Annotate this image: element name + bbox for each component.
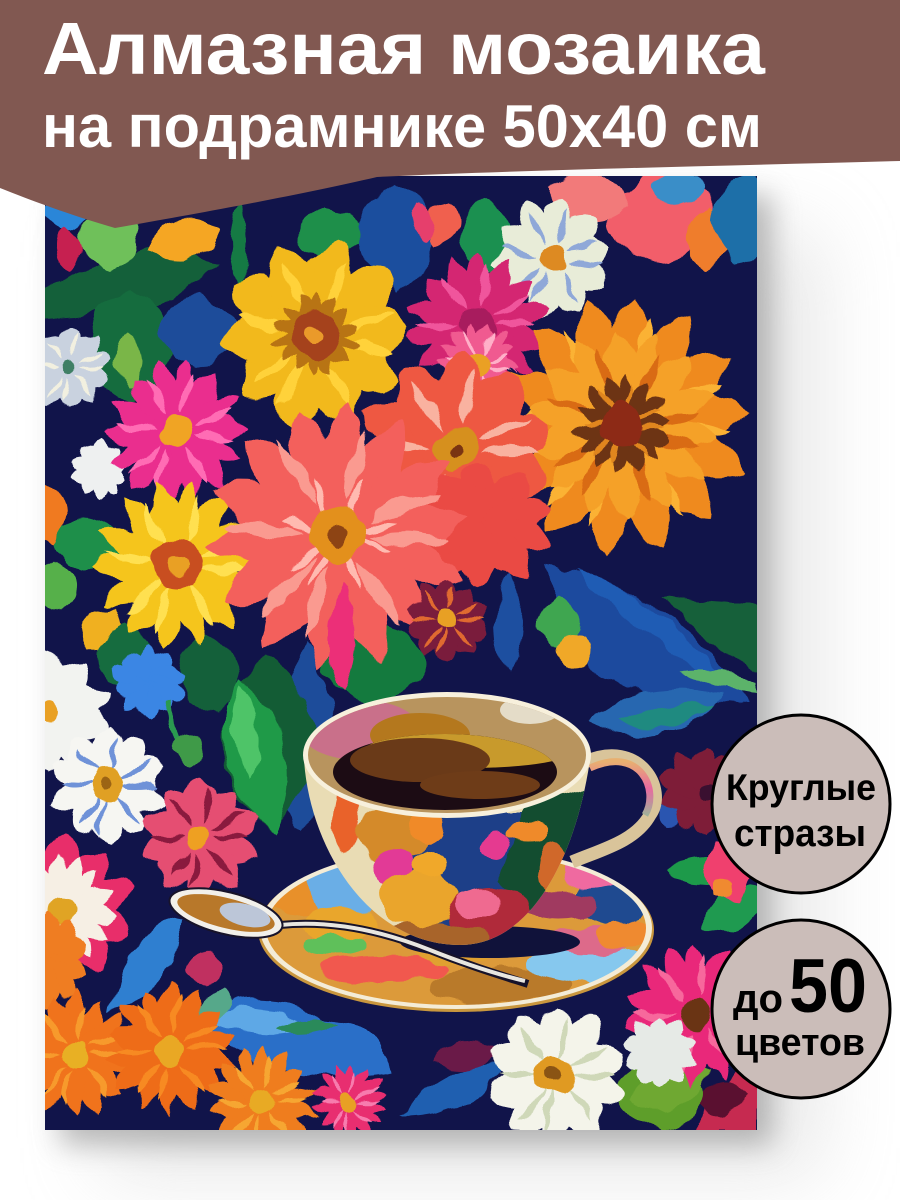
flower: daisy white xyxy=(48,727,168,843)
flower: orange bottom right xyxy=(208,1046,320,1130)
flower: coral center xyxy=(192,392,482,690)
cup shadow on saucer xyxy=(400,926,580,958)
flower: yellow left xyxy=(81,469,275,662)
flower: white and blue left xyxy=(45,328,110,407)
flower: dark red right xyxy=(659,748,724,835)
spoon xyxy=(165,879,528,984)
bud: green with yellow flower xyxy=(539,600,590,666)
background foliage xyxy=(23,162,788,1130)
saucer xyxy=(259,860,654,1012)
flower: orange bottom left xyxy=(45,988,127,1116)
cup rim and inside xyxy=(303,692,591,818)
flower: pink right xyxy=(625,945,731,1089)
cup xyxy=(300,692,655,958)
badge: up to 50 colours: до xyxy=(733,977,783,1021)
flora painted layer xyxy=(45,176,757,1130)
flower: orange bottom xyxy=(103,984,237,1116)
flower: small pink top xyxy=(436,324,518,381)
flower: magenta top xyxy=(406,253,550,375)
flower: pink small xyxy=(142,778,259,888)
header banner xyxy=(0,0,900,228)
badge: up to 50 colours: 50 xyxy=(789,944,867,1029)
badge: round rhinestones: Круглые xyxy=(726,767,876,808)
bud: green xyxy=(165,700,205,768)
flower: dark red small xyxy=(407,580,487,662)
painting: coffee cup and flowers xyxy=(45,176,757,1130)
cup handle xyxy=(572,756,655,862)
heading line 1: Алмазная мозаика xyxy=(42,7,766,90)
flower: orange large xyxy=(477,282,767,569)
flower: white and blue top xyxy=(490,198,608,318)
flower: daisy white partial xyxy=(0,650,112,774)
badge: round rhinestones: стразы xyxy=(734,813,866,855)
cup body xyxy=(304,760,590,945)
flower: white bottom xyxy=(490,1008,625,1130)
petals: coral lower xyxy=(403,463,557,587)
flower: white and pink lower left xyxy=(45,834,134,972)
leaf: green large xyxy=(222,679,288,836)
flower: white left middle xyxy=(69,440,131,500)
badge: round rhinestones xyxy=(712,715,890,893)
heading line 2: на подрамнике 50х40 см xyxy=(42,93,762,160)
badge: up to 50 colours xyxy=(712,920,890,1098)
flower: pink left xyxy=(104,360,248,498)
coffee xyxy=(333,734,557,810)
petals: orange left edge xyxy=(45,910,86,1010)
flower: blue small left xyxy=(111,646,185,718)
flower: coral right xyxy=(361,350,548,502)
flower: white right xyxy=(623,1016,697,1088)
flower: pink bottom xyxy=(312,1064,387,1130)
badge: up to 50 colours: цветов xyxy=(735,1022,865,1064)
canvas shadow xyxy=(60,195,820,1175)
flower: yellow top xyxy=(197,219,433,451)
